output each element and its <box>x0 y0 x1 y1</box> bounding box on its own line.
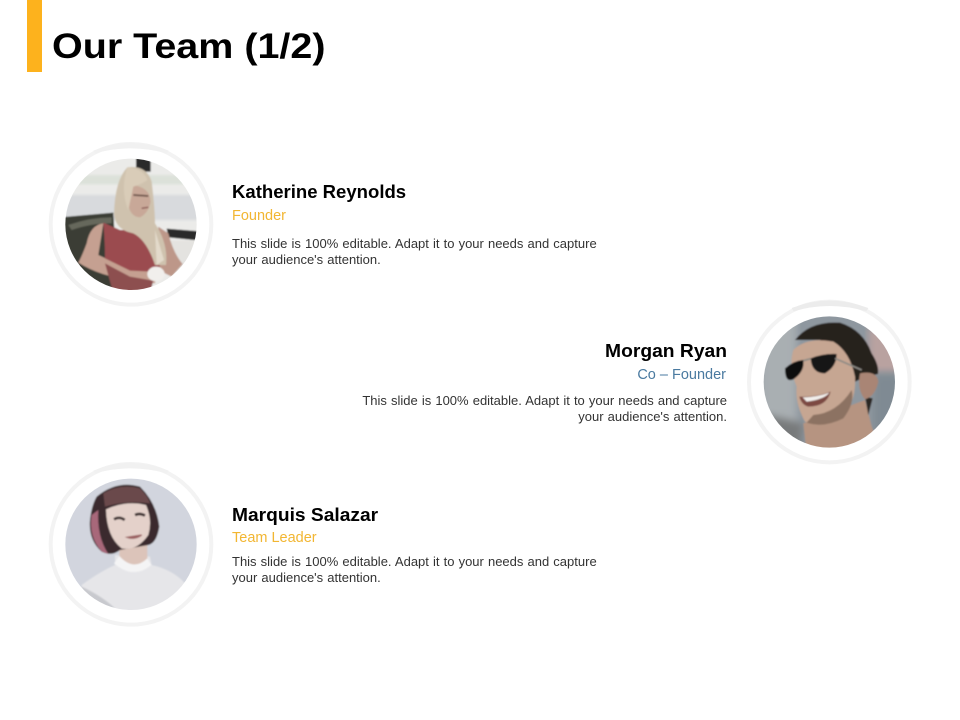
description <box>362 393 727 424</box>
description <box>232 554 597 585</box>
ear <box>859 373 878 399</box>
description: This slide is 100% editable. Adapt it to your needs and capture <box>232 236 597 251</box>
title: Our Team (1/2) <box>52 27 326 66</box>
hair <box>90 485 159 554</box>
description: This slide is 100% editable. Adapt it to your needs and capture <box>362 393 727 408</box>
description <box>232 236 597 267</box>
description: This slide is 100% editable. Adapt it to your needs and capture <box>232 554 597 569</box>
portrait: Katherine Reynolds <box>49 142 213 306</box>
hair back <box>114 167 166 265</box>
description: your audience's attention. <box>578 409 727 424</box>
body <box>82 555 184 610</box>
hair <box>795 322 878 383</box>
mouth <box>799 392 831 407</box>
description: your audience's attention. <box>232 252 381 267</box>
portrait: Marquis Salazar <box>49 462 213 626</box>
red top <box>103 223 160 272</box>
portrait: Morgan Ryan <box>747 300 912 464</box>
face <box>106 503 150 549</box>
cup <box>147 267 165 281</box>
role: Team Leader <box>232 530 317 546</box>
face <box>127 185 151 217</box>
face <box>791 340 855 424</box>
arms <box>78 223 157 283</box>
role: Founder <box>232 208 286 224</box>
role: Co – Founder <box>637 367 726 383</box>
collar <box>114 556 151 572</box>
profile: Morgan Ryan <box>362 341 727 424</box>
title accent bar <box>27 0 42 72</box>
description: your audience's attention. <box>232 570 381 585</box>
neck <box>119 545 147 567</box>
name: Marquis Salazar <box>232 505 378 525</box>
sunglasses <box>785 360 804 380</box>
neck <box>802 400 874 448</box>
name: Morgan Ryan <box>605 341 727 361</box>
profile: Marquis Salazar <box>232 505 597 585</box>
profile: Katherine Reynolds <box>232 182 597 267</box>
name: Katherine Reynolds <box>232 182 406 202</box>
